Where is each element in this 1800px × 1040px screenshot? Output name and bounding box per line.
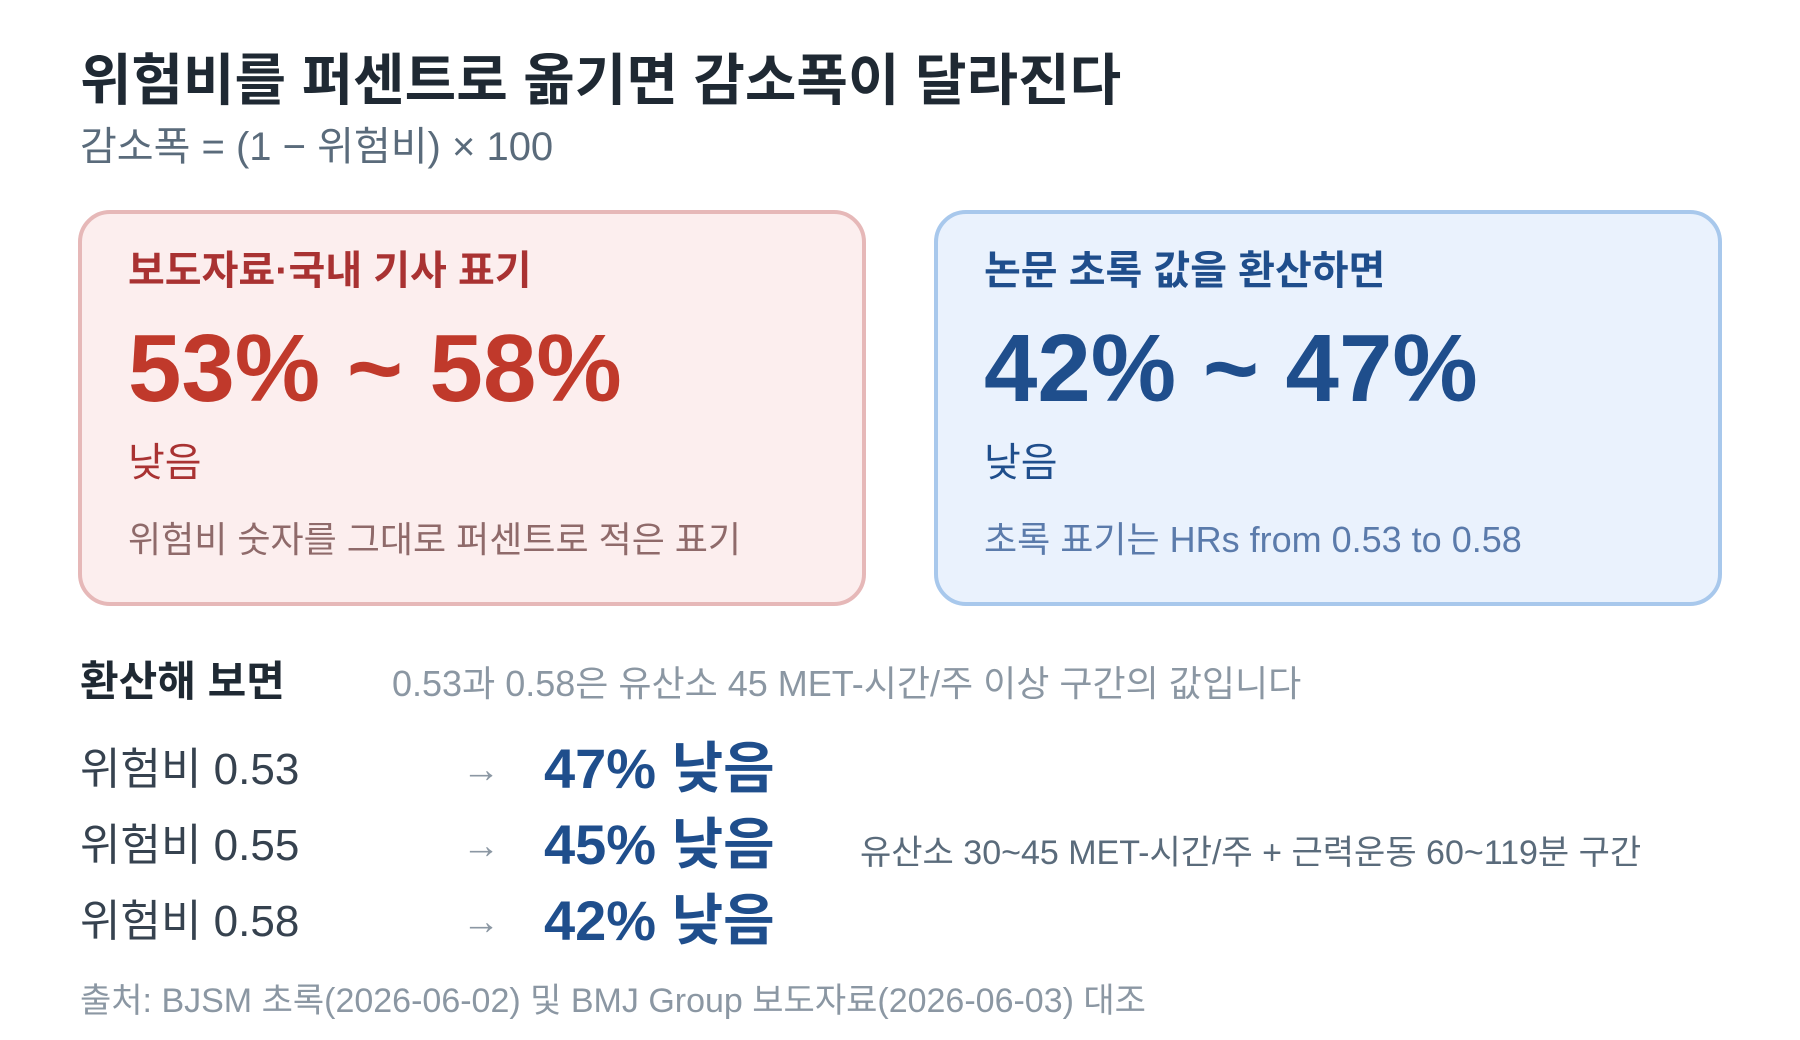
conversion row: 0.58: → [462,901,500,943]
title: 위험비를 퍼센트로 옮기면 감소폭이 달라진다 [80,49,1121,112]
panel heading: blue card: 논문 초록 값을 환산하면 [984,249,1385,293]
panel heading: red card: 보도자료·국내 기사 표기 [128,249,532,293]
source footnote: 출처: BJSM 초록(2026-06-02) 및 BMJ Group 보도자료(2026-06-03) 대조 [80,982,1146,1020]
description: blue card: 초록 표기는 HRs from 0.53 to 0.58 [984,519,1522,560]
description: red card: 위험비 숫자를 그대로 퍼센트로 적은 표기 [128,519,741,560]
panel: press release figures [80,212,864,604]
panel background: red card [80,212,864,604]
conversion row: 0.58 [80,889,775,952]
conversion row: 0.55: → [462,825,500,867]
conversion row: 0.53 [80,737,775,800]
label: lower: 낮음 [128,441,202,485]
section heading: 환산해 보면 [80,658,285,705]
section note: 0.53과 0.58은 유산소 45 MET-시간/주 이상 구간의 값입니다 [392,663,1301,704]
conversion row: 0.53: → [462,749,500,791]
label: lower: 낮음 [984,441,1058,485]
subtitle: formula: 감소폭 = (1 − 위험비) × 100 [80,125,553,169]
conversion row: 0.53: 위험비 0.53 [80,745,299,794]
conversion row: 0.55 [80,813,775,876]
big number: 42% ~ 47%: 42% ~ 47% [984,315,1478,422]
conversion row: 0.58: 42% 낮음 [544,889,775,952]
conversion row: 0.58: 위험비 0.58 [80,897,299,946]
panel: converted abstract values [936,212,1720,604]
conversion row: 0.53: 47% 낮음 [544,737,775,800]
big number: 53% ~ 58%: 53% ~ 58% [128,315,622,422]
panel background: blue card [936,212,1720,604]
conversion row: 0.55: 위험비 0.55 [80,821,299,870]
row note: 유산소 30~45 MET-시간/주 + 근력운동 60~119분 구간 [860,834,1641,872]
conversion row: 0.55: 45% 낮음 [544,813,775,876]
